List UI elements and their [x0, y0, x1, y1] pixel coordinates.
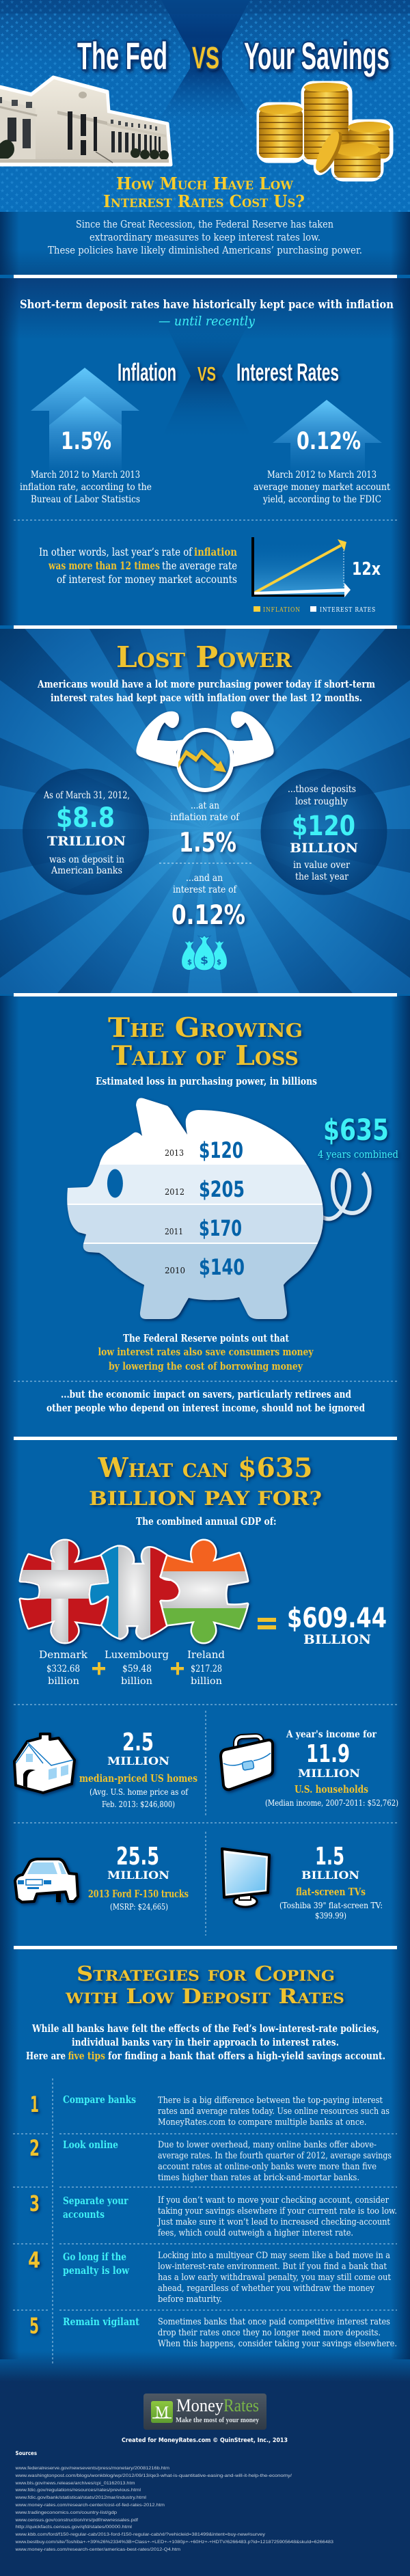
stat: household income: A year's income for: [286, 1729, 377, 1740]
stat: median-priced homes: median-priced US homes: [79, 1773, 197, 1785]
stat: median-priced homes: [79, 1728, 197, 1809]
logo: MoneyRates: [144, 2394, 266, 2430]
tip 3: separate your accounts: accounts: [63, 2209, 105, 2221]
panel: loss circle: $120: [292, 811, 355, 842]
tip 3: separate your accounts: Separate your: [63, 2195, 128, 2207]
tip 3: separate your accounts: fees, which could outweigh a higher interest rate.: [158, 2228, 353, 2238]
logo: MoneyRates: M: [155, 2404, 169, 2422]
panel: center rates: inflation rate of: [170, 812, 240, 823]
heading: the growing tally of loss: Tally of Loss: [111, 1040, 299, 1072]
tip 4: go long if the penalty is low: 4: [28, 2247, 40, 2273]
arrow: inflation: [31, 368, 139, 473]
text: 12 times statement: In other words, last year’s rate of: [39, 545, 193, 558]
stat: household income: [265, 1729, 398, 1808]
heading: strategies for coping: [65, 1962, 344, 2009]
panel background: star field header: [0, 0, 410, 275]
panel: loss circle: lost roughly: [295, 796, 348, 807]
panel: center rates: 0.12%: [172, 900, 245, 931]
text: 12 times statement: inflation: [194, 545, 237, 558]
panel: deposits circle: As of March 31, 2012,: [43, 790, 130, 801]
graphic: flag puzzle pieces: [17, 1538, 253, 1647]
panel background: footer: [0, 2351, 410, 2576]
arrow: inflation line: [255, 539, 346, 593]
heading: strategies for coping: with Low Deposit Rates: [65, 1985, 344, 2009]
tip 2: look online: Look online: [63, 2139, 118, 2151]
heading: lost power: Lost Power: [116, 640, 292, 674]
stat: ford trucks: MILLION: [107, 1869, 169, 1882]
caption: inflation rate: inflation rate, according to the: [20, 482, 152, 493]
puzzle piece: Ireland: [157, 1538, 253, 1646]
title: VS: [192, 40, 219, 75]
panel: deposits circle: TRILLION: [47, 834, 126, 849]
image: stacks of gold coins: [259, 83, 391, 179]
intro text: strategies: Here are: [26, 2050, 66, 2062]
2010 row: $140: [199, 1254, 245, 1280]
2012 row: $205: [199, 1176, 245, 1202]
subheading: estimated loss: Estimated loss in purchasing power, in billions: [96, 1075, 317, 1087]
panel: center rates: ...at an: [191, 800, 219, 811]
caption: money market yield: [254, 470, 391, 505]
stat: ford trucks: 2013 Ford F-150 trucks: [88, 1888, 189, 1900]
sources: www.money-rates.com/research-center/cost-of-fed-rates-2012.htm: [14, 2503, 165, 2508]
text: economic impact note: ...but the economic impact on savers, particularly retirees and: [61, 1388, 351, 1400]
tip 2: look online: [29, 2135, 392, 2183]
arrow: interest line: [254, 583, 351, 597]
sources: Sources: [15, 2450, 37, 2456]
stat: tvs: $399.99): [315, 1911, 346, 1921]
heading: what can $635 billion pay for: BILLION PAY FOR?: [89, 1487, 322, 1510]
heading: inflation vs interest rates: [118, 358, 339, 386]
stat: household income: 11.9: [306, 1740, 350, 1768]
stat: $635 combined: 4 years combined: [318, 1150, 398, 1161]
stat: household income: MILLION: [298, 1767, 360, 1780]
chart: piggy bank: [62, 1094, 370, 1323]
2011 row: 2011: [165, 1227, 183, 1236]
caption: inflation rate: March 2012 to March 2013: [31, 470, 140, 480]
credit line: Created for MoneyRates.com © QuinStreet, Inc., 2013: [122, 2437, 288, 2444]
intro text: lost power: [37, 678, 375, 704]
stat: combined GDP total: BILLION: [303, 1632, 371, 1647]
label: 12x: 12x: [352, 559, 381, 580]
title: The Fed: [77, 34, 167, 77]
label: Denmark: billion: [48, 1676, 79, 1687]
stat: tvs: flat-screen TVs: [296, 1886, 366, 1898]
tip 4: go long if the penalty is low: low-interest-rate environment. But if you find a bank that: [158, 2262, 387, 2272]
stat: 0.12%: 0.12%: [297, 428, 361, 455]
stat: combined GDP total: $609.44: [287, 1603, 387, 1634]
panel: deposits circle: $8.8: [56, 802, 115, 834]
legend: INTEREST RATES: [320, 607, 376, 614]
caption: money market yield: March 2012 to March 2013: [267, 470, 377, 480]
tip 4: go long if the penalty is low: before maturity.: [158, 2294, 222, 2305]
tip 4: go long if the penalty is low: has a low early withdrawal penalty, you may still come out: [158, 2273, 392, 2283]
heading: short-term deposit rates: — until recently: [159, 314, 255, 329]
2013 row: $120: [199, 1137, 243, 1163]
sources: www.fdic.gov/bank/statistical/stats/2012mar/industry.html: [14, 2495, 147, 2500]
heading: the growing tally of loss: [108, 1012, 303, 1072]
label: Denmark: [39, 1649, 88, 1687]
icon: plus: [92, 1662, 105, 1675]
tip 2: look online: times higher than rates at brick-and-mortar banks.: [158, 2173, 359, 2183]
caption: inflation rate: Bureau of Labor Statistics: [31, 494, 140, 505]
sources: www.fdic.gov/regulations/resources/rates/previous.html: [14, 2488, 141, 2493]
sources: [14, 2450, 333, 2552]
tip 2: look online: account rates at online-only banks were more than five: [158, 2162, 377, 2172]
tip 1: compare banks: Compare banks: [63, 2094, 136, 2106]
icon: muscles with falling arrow: [136, 711, 274, 790]
heading: strategies for coping: Strategies for Coping: [77, 1962, 335, 1986]
stat: ford trucks: (MSRP: $24,665): [110, 1902, 168, 1912]
front coin stack: [334, 143, 381, 178]
intro text: [48, 218, 362, 256]
stat: $635 combined: $635: [323, 1113, 389, 1148]
text: 12 times statement: [39, 545, 237, 586]
tip 2: look online: 2: [29, 2135, 40, 2161]
tip 4: go long if the penalty is low: ahead, regardless of whether you withdraw the money: [158, 2283, 375, 2294]
icon: money bags: $: [187, 958, 192, 966]
2010 row: 2010: [165, 1266, 185, 1275]
legend: INFLATION: [263, 607, 301, 614]
image: Federal Reserve building: [0, 77, 171, 165]
2011 row: [165, 1215, 242, 1241]
puzzle piece: Denmark: [17, 1538, 113, 1647]
icon: briefcase: [221, 1736, 273, 1789]
sources: www.tradingeconomics.com/country-list/gdp: [14, 2510, 117, 2515]
pig body: [62, 1094, 335, 1323]
2012 row: [165, 1176, 245, 1202]
label: Denmark: Denmark: [39, 1649, 88, 1661]
label: Denmark: $332.68: [46, 1664, 80, 1675]
stat: combined GDP total: [287, 1603, 387, 1647]
tip 3: separate your accounts: [29, 2191, 397, 2238]
label: Ireland: $217.28: [191, 1664, 222, 1675]
heading: how much have low interest rates cost us: How Much Have Low: [116, 174, 294, 193]
sources: www.federalreserve.gov/newsevents/press/monetary/20081216b.htm: [14, 2466, 169, 2471]
intro text: Since the Great Recession, the Federal Reserve has taken: [76, 218, 333, 230]
text: federal reserve note: low interest rates also save consumers money: [98, 1346, 314, 1358]
stat: tvs: (Toshiba 39" flat-screen TV:: [279, 1901, 383, 1910]
sources: http://quickfacts.census.gov/qfd/states/00000.html: [15, 2525, 133, 2530]
heading: short-term deposit rates: [20, 298, 394, 329]
panel: loss circle: BILLION: [290, 841, 358, 856]
tip 5: remain vigilant: Remain vigilant: [63, 2316, 139, 2328]
intro text: strategies: [26, 2023, 385, 2062]
panel: loss circle: the last year: [295, 871, 348, 882]
icon: money bags: $: [217, 958, 221, 966]
stat: tvs: 1.5: [315, 1843, 344, 1871]
tip 1: compare banks: There is a big difference between the top-paying interest: [158, 2096, 383, 2106]
tip 1: compare banks: 1: [30, 2091, 39, 2117]
title: [77, 34, 390, 77]
icon: money bags: $: [200, 954, 208, 966]
stat: household income: U.S. households: [295, 1784, 368, 1795]
panel: center rates: 1.5%: [179, 828, 236, 858]
sources: www.bestbuy.com/site/Toshiba+-+39%26%2334%3B+Class+-+LED+-+1080p+-+60Hz+-+HDTV/6266483.p?id=1218725905648&skuId=6266483: [14, 2540, 333, 2545]
stat: median-priced homes: Feb. 2013: $246,800): [102, 1800, 175, 1809]
label: Ireland: [187, 1649, 225, 1687]
tip 4: go long if the penalty is low: penalty is low: [63, 2265, 129, 2277]
text: 12 times statement: the average rate: [162, 559, 237, 572]
panel background: sunburst: [0, 629, 410, 994]
stat: $635 combined: [318, 1113, 398, 1161]
2013 row: 2013: [165, 1148, 184, 1158]
subheading: combined GDP: The combined annual GDP of:: [136, 1515, 276, 1528]
panel: deposits circle: [23, 768, 149, 895]
intro text: strategies: individual banks vary in their approach to interest rates.: [72, 2037, 339, 2048]
label: Luxembourg: billion: [121, 1676, 152, 1687]
legend: [254, 606, 376, 614]
panel: loss circle: [261, 768, 387, 895]
stat: median-priced homes: (Avg. U.S. home price as of: [90, 1787, 189, 1797]
text: federal reserve note: The Federal Reserve points out that: [123, 1332, 289, 1344]
text: federal reserve note: [98, 1332, 314, 1372]
caption: money market yield: yield, according to the FDIC: [262, 494, 381, 505]
panel: center rates: ...and an: [186, 873, 223, 884]
2011 row: $170: [199, 1215, 242, 1241]
chart: inflation vs interest: [251, 537, 381, 614]
sources: www.kbb.com/ford/f150-regular-cab/2013-ford-f150-regular-cab/xl/?vehicleid=381499&intent=buy-new#survey: [14, 2532, 266, 2537]
stat: tvs: [279, 1843, 383, 1921]
heading: the growing tally of loss: The Growing: [108, 1012, 303, 1044]
label: Ireland: billion: [191, 1676, 222, 1687]
text: 12 times statement: was more than 12 times: [48, 559, 160, 572]
label: Luxembourg: [105, 1649, 169, 1687]
tilted coin: [311, 128, 347, 176]
logo: MoneyRates: Rates: [223, 2396, 259, 2415]
arrow: interest rates: [273, 400, 382, 475]
tip 5: remain vigilant: drop their rates once they no longer need more deposits.: [158, 2328, 381, 2338]
tip 4: go long if the penalty is low: [28, 2247, 392, 2305]
middle coin stack: [304, 83, 348, 159]
tip 4: go long if the penalty is low: Go long if the: [63, 2251, 126, 2263]
panel: loss circle: ...those deposits: [288, 784, 356, 795]
panel: deposits circle: was on deposit in: [49, 854, 124, 865]
icon: truck: [15, 1859, 78, 1902]
heading: what can $635 billion pay for: [89, 1452, 322, 1510]
stat: median-priced homes: MILLION: [107, 1754, 169, 1767]
logo: MoneyRates: Make the most of your money: [176, 2417, 259, 2424]
tip 1: compare banks: MoneyRates.com to compare multiple banks at once.: [158, 2117, 366, 2128]
2013 row: [165, 1137, 243, 1163]
sources: www.census.gov/construction/nrs/pdf/newressales.pdf: [14, 2518, 138, 2523]
heading: inflation vs interest rates: Interest Rates: [236, 358, 339, 386]
panel: center rates: [159, 800, 252, 931]
tip 3: separate your accounts: 3: [29, 2191, 40, 2216]
text: federal reserve note: by lowering the cost of borrowing money: [109, 1360, 303, 1372]
2010 row: [165, 1254, 245, 1280]
sources: www.washingtonpost.com/blogs/wonkblog/wp/2012/09/13/qe3-what-is-quantitative-easing-and-will-it-help-the-economy/: [14, 2473, 292, 2478]
panel: deposits circle: American banks: [51, 865, 122, 876]
panel: loss circle: in value over: [293, 860, 351, 871]
tip 1: compare banks: [30, 2091, 390, 2128]
heading: inflation vs interest rates: VS: [197, 364, 216, 385]
stat: tvs: BILLION: [301, 1869, 359, 1882]
intro text: strategies: five tips: [68, 2050, 105, 2062]
icon: flat-screen tv: [222, 1849, 269, 1907]
stat: 1.5%: 1.5%: [61, 428, 111, 455]
icon: money bags: [182, 935, 227, 971]
heading: how much have low interest rates cost us: Interest Rates Cost Us?: [103, 191, 305, 211]
tip 5: remain vigilant: [29, 2313, 397, 2349]
stat: ford trucks: [88, 1843, 189, 1912]
text: economic impact note: [46, 1388, 365, 1414]
heading: inflation vs interest rates: Inflation: [118, 358, 176, 386]
caption: inflation rate: [20, 470, 152, 505]
icon: house: [14, 1734, 74, 1793]
stat: median-priced homes: 2.5: [122, 1728, 154, 1757]
panel background: inflation section: [0, 278, 410, 443]
panel: center rates: interest rate of: [173, 884, 237, 895]
pig tail: [321, 1170, 370, 1219]
intro text: These policies have likely diminished Americans’ purchasing power.: [48, 244, 362, 256]
label: Luxembourg: Luxembourg: [105, 1649, 169, 1661]
sources: www.money-rates.com/research-center/americas-best-rates/2012-Q4.htm: [14, 2547, 180, 2552]
equals sign: [258, 1618, 276, 1629]
right coin stack: [348, 122, 390, 159]
icon: plus: [171, 1662, 184, 1675]
logo: MoneyRates: Money: [176, 2396, 223, 2415]
heading: what can $635 billion pay for: What can $635: [97, 1452, 313, 1484]
label: Ireland: Ireland: [187, 1649, 225, 1661]
2012 row: 2012: [165, 1187, 184, 1197]
puzzle piece: Luxembourg: [90, 1545, 179, 1643]
text: 12 times statement: of interest for money market accounts: [57, 573, 237, 586]
heading: how much have low interest rates cost us: [103, 174, 305, 211]
left coin stack: [259, 105, 303, 158]
stat: ford trucks: 25.5: [116, 1843, 159, 1871]
pig eye: [107, 1169, 123, 1197]
sources: www.bls.gov/news.release/archives/cpi_01162013.htm: [14, 2481, 135, 2486]
tip 5: remain vigilant: 5: [29, 2313, 39, 2339]
caption: money market yield: average money market account: [254, 482, 391, 493]
label: Luxembourg: $59.48: [122, 1664, 152, 1675]
white sticker outline: [259, 83, 391, 179]
tip 2: look online: Due to lower overhead, many online banks offer above-: [158, 2140, 377, 2150]
intro text: extraordinary measures to keep interest rates low.: [90, 231, 320, 243]
